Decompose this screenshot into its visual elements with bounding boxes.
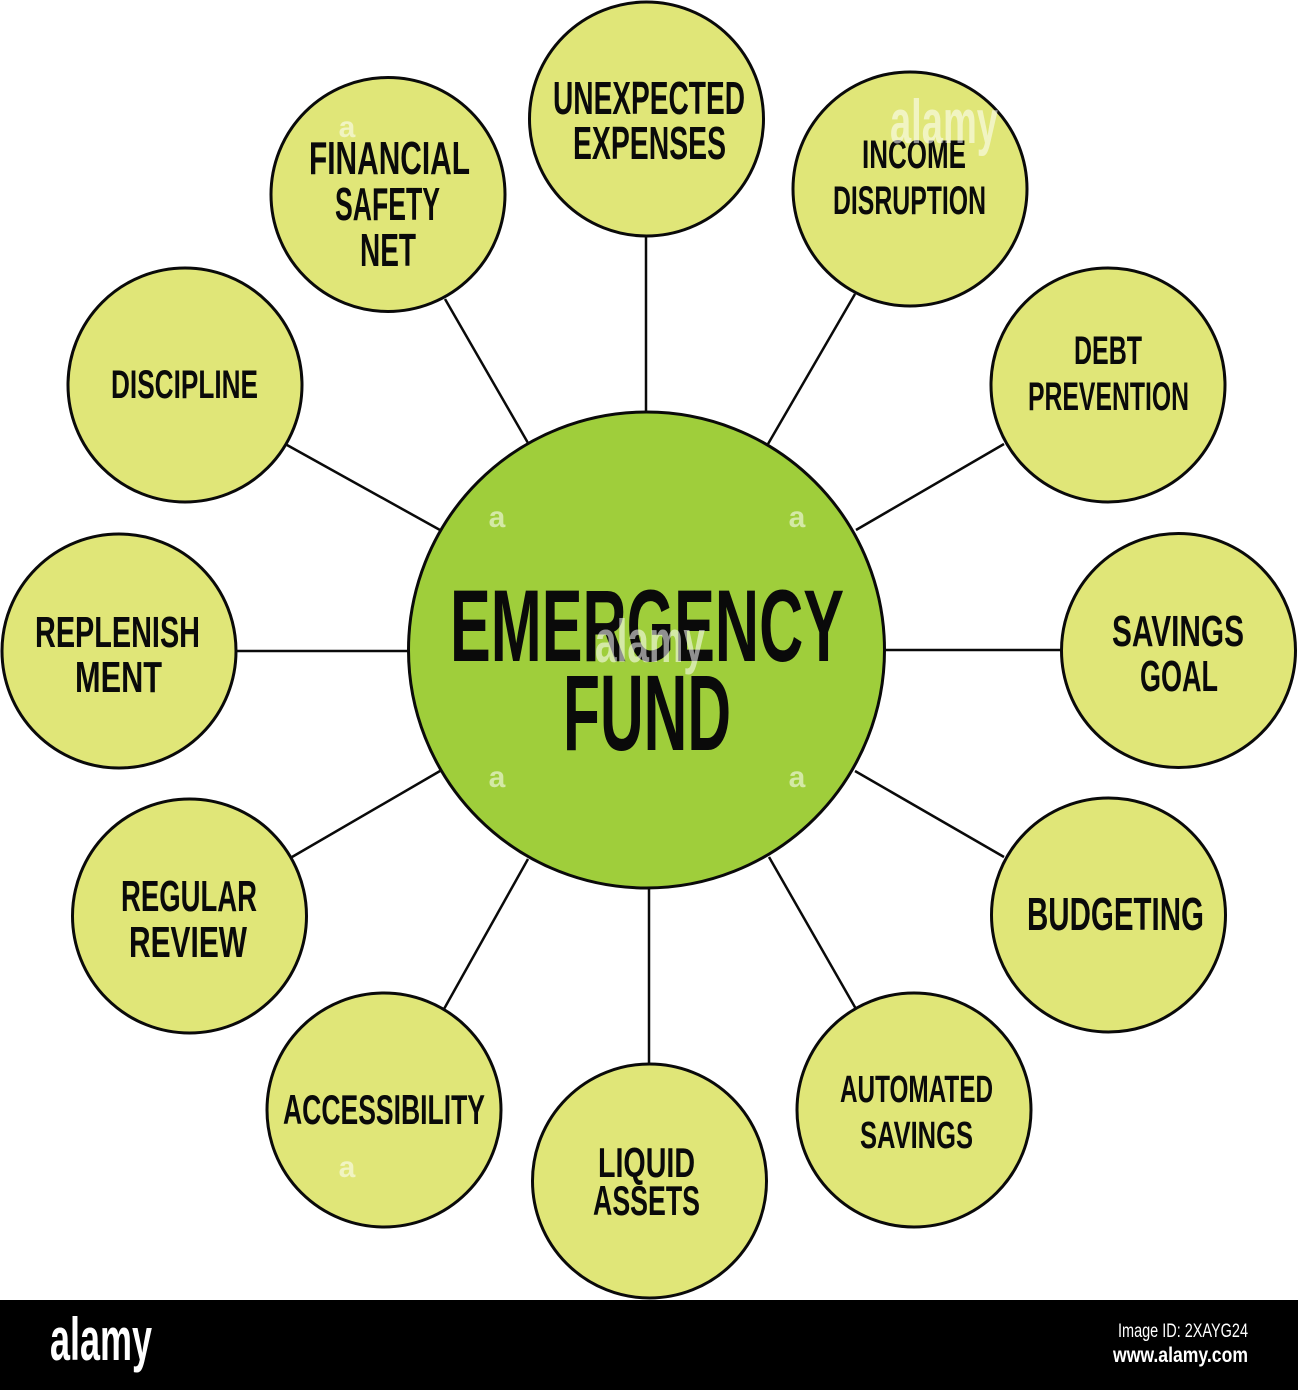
node: savings goal bbox=[1062, 534, 1296, 768]
node: financial safety net: NET bbox=[360, 224, 416, 276]
node: automated savings bbox=[797, 993, 1031, 1227]
node: financial safety net: SAFETY bbox=[335, 178, 440, 230]
node: discipline bbox=[68, 268, 302, 502]
watermark marks: a bbox=[789, 761, 806, 794]
watermark marks: a bbox=[339, 1151, 356, 1184]
footer url: www.alamy.com bbox=[1112, 1344, 1248, 1367]
node: debt prevention: PREVENTION bbox=[1028, 375, 1189, 419]
watermark marks: a bbox=[789, 501, 806, 534]
footer logo: alamy: alamy bbox=[50, 1306, 152, 1373]
node: debt prevention bbox=[991, 268, 1225, 502]
node: replenishment bbox=[2, 534, 236, 768]
node: financial safety net: FINANCIAL bbox=[309, 132, 470, 184]
node: accessibility bbox=[267, 993, 501, 1227]
node: liquid assets bbox=[532, 1064, 766, 1298]
connector lines bbox=[237, 236, 1062, 1063]
node: regular review: REVIEW bbox=[129, 918, 247, 967]
node: debt prevention: DEBT bbox=[1074, 329, 1142, 373]
footer bar bbox=[0, 1300, 1298, 1390]
watermark marks: a bbox=[489, 501, 506, 534]
node: automated savings: SAVINGS bbox=[860, 1115, 973, 1157]
node: replenishment: REPLENISH bbox=[35, 608, 200, 657]
node: replenishment: MENT bbox=[75, 653, 162, 702]
node: unexpected expenses: UNEXPECTED bbox=[553, 72, 745, 124]
watermark marks: alamy bbox=[595, 608, 705, 675]
node: accessibility: ACCESSIBILITY bbox=[283, 1086, 485, 1133]
watermark marks bbox=[339, 88, 998, 1184]
central node: emergency fund: EMERGENCY bbox=[450, 569, 844, 683]
node: liquid assets: ASSETS bbox=[593, 1177, 700, 1224]
node: income disruption: DISRUPTION bbox=[833, 179, 986, 223]
node: regular review: REGULAR bbox=[121, 872, 257, 921]
node: budgeting: BUDGETING bbox=[1027, 888, 1204, 940]
node: unexpected expenses bbox=[530, 2, 764, 236]
node: regular review bbox=[72, 799, 306, 1033]
watermark marks: alamy bbox=[890, 88, 998, 157]
node: financial safety net bbox=[271, 78, 505, 312]
watermark marks: a bbox=[339, 111, 356, 144]
footer image id: Image ID: 2XAYG24 bbox=[1118, 1321, 1248, 1342]
node: savings goal: GOAL bbox=[1140, 652, 1218, 701]
node: automated savings: AUTOMATED bbox=[840, 1069, 993, 1111]
node: unexpected expenses: EXPENSES bbox=[573, 117, 726, 169]
node: income disruption: INCOME bbox=[862, 133, 966, 177]
node: income disruption bbox=[793, 72, 1027, 306]
watermark marks: a bbox=[489, 761, 506, 794]
node: liquid assets: LIQUID bbox=[598, 1139, 695, 1186]
node: budgeting bbox=[992, 798, 1226, 1032]
central node: emergency fund bbox=[408, 412, 884, 888]
central node: emergency fund: FUND bbox=[563, 652, 731, 773]
node: discipline: DISCIPLINE bbox=[111, 363, 258, 407]
